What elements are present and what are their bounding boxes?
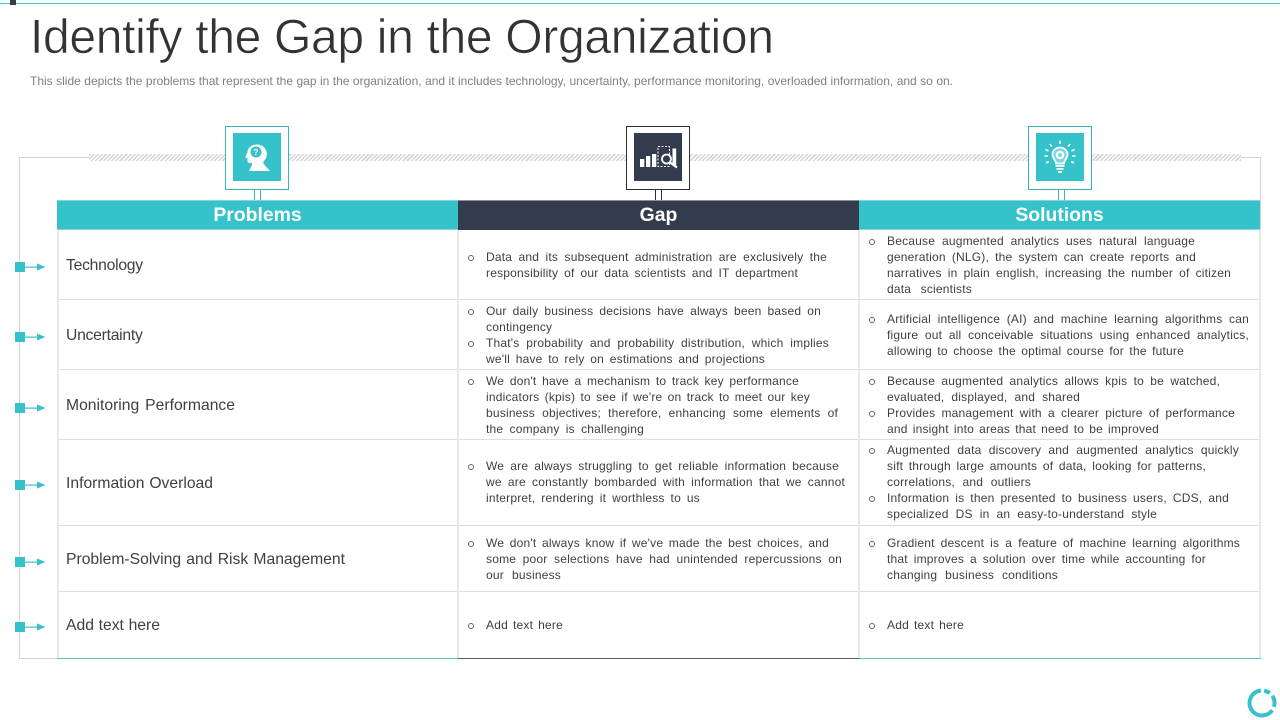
problem label: Information Overload: Information Overload bbox=[66, 475, 213, 492]
gap: uncertainty: That's probability and probability distribution, which implies bbox=[486, 336, 829, 350]
solution: information overload bbox=[869, 443, 1239, 521]
solution: monitoring performance: evaluated, displayed, and shared bbox=[887, 390, 1080, 404]
gap: technology: responsibility of our data scientists and IT department bbox=[486, 266, 798, 280]
icon: problems head: ? bbox=[253, 147, 259, 157]
gap: technology bbox=[468, 250, 827, 280]
gap: information overload: we are constantly bombarded with information that we cannot bbox=[486, 475, 845, 489]
icon: problems head bbox=[225, 126, 289, 190]
solution: information overload: Information is then presented to business users, CDS, and bbox=[887, 491, 1229, 505]
solution: uncertainty: allowing to choose the optimal course for the future bbox=[887, 344, 1184, 358]
gap: uncertainty: we'll have to rely on estimations and projections bbox=[486, 352, 765, 366]
header: Problems bbox=[57, 200, 458, 230]
row arrow 1 bbox=[15, 262, 46, 272]
logo ring bbox=[1248, 688, 1277, 718]
subtitle: This slide depicts the problems that represent the gap in the organization, and it includes technology, uncertainty, performance monitoring, overloaded information, and so on. bbox=[30, 74, 953, 88]
solution: monitoring performance bbox=[869, 374, 1235, 436]
solution: information overload: specialized DS in an easy-to-understand style bbox=[887, 507, 1157, 521]
header: Solutions: Solutions bbox=[1015, 204, 1104, 226]
solution: add text: Add text here bbox=[887, 618, 964, 632]
solution: problem-solving bbox=[869, 536, 1240, 582]
table bottom rule: gap bbox=[458, 658, 859, 659]
gap: problem-solving bbox=[468, 536, 842, 582]
row arrow 4 bbox=[15, 480, 46, 490]
connector: problems bbox=[254, 190, 261, 200]
gap: information overload: interpret, rendering it worthless to us bbox=[486, 491, 700, 505]
hatched band bbox=[89, 154, 1241, 161]
gap: problem-solving: We don't always know if we've made the best choices, and bbox=[486, 536, 829, 550]
gap: problem-solving: some poor selections have had unintended repercussions on bbox=[486, 552, 842, 566]
solution: monitoring performance: Provides management with a clearer picture of performance bbox=[887, 406, 1235, 420]
solution: problem-solving: that improves a solution over time while accounting for bbox=[887, 552, 1206, 566]
solution: problem-solving: Gradient descent is a feature of machine learning algorithms bbox=[887, 536, 1240, 550]
problem label: Monitoring Performance: Monitoring Performance bbox=[66, 397, 235, 414]
row arrow 6 bbox=[15, 622, 46, 632]
header: Gap bbox=[458, 200, 859, 230]
gap: monitoring performance: We don't have a mechanism to track key performance bbox=[486, 374, 799, 388]
table background bbox=[57, 230, 1260, 659]
problem label: Technology: Technology bbox=[66, 257, 143, 274]
solution: technology: data scientists bbox=[887, 282, 972, 296]
row arrow 3 bbox=[15, 403, 46, 413]
gap: monitoring performance bbox=[468, 374, 838, 436]
problem label: Uncertainty: Uncertainty bbox=[66, 327, 143, 344]
gap: technology: Data and its subsequent administration are exclusively the bbox=[486, 250, 827, 264]
table bottom rule: solutions bbox=[859, 658, 1261, 659]
table bottom rule: problems bbox=[57, 658, 458, 659]
solution: monitoring performance: and insight into areas that need to be improved bbox=[887, 422, 1159, 436]
solution: problem-solving: changing business conditions bbox=[887, 568, 1058, 582]
solution: uncertainty bbox=[869, 312, 1249, 358]
icon: solutions light bulb bbox=[1028, 126, 1092, 190]
solution: technology: generation (NLG), the system can create reports and bbox=[887, 250, 1196, 264]
solution: uncertainty: Artificial intelligence (AI) and machine learning algorithms can bbox=[887, 312, 1249, 326]
solution: information overload: Augmented data discovery and augmented analytics quickly bbox=[887, 443, 1239, 457]
solution: uncertainty: figure out all conceivable situations using enhanced analytics, bbox=[887, 328, 1249, 342]
row arrow 5 bbox=[15, 557, 46, 567]
title: Identify the Gap in the Organization bbox=[30, 11, 774, 64]
header: Problems: Problems bbox=[213, 204, 302, 226]
problem label: Problem-Solving and Risk Management: Problem-Solving and Risk Management bbox=[66, 551, 345, 568]
icon: gap analysis chart bbox=[626, 126, 690, 190]
gap: monitoring performance: business objectives; therefore, enhancing some elements of bbox=[486, 406, 838, 420]
top accent marker bbox=[10, 0, 16, 5]
solution: monitoring performance: Because augmented analytics allows kpis to be watched, bbox=[887, 374, 1220, 388]
top accent line bbox=[0, 3, 1280, 4]
row arrow 2 bbox=[15, 332, 46, 342]
solution: information overload: sift through large amounts of data, looking for patterns, bbox=[887, 459, 1206, 473]
header: Gap: Gap bbox=[640, 204, 677, 226]
solution: technology: narratives in plain english, increasing the number of citizen bbox=[887, 266, 1231, 280]
solution: information overload: correlations, and outliers bbox=[887, 475, 1031, 489]
gap: add text: Add text here bbox=[486, 618, 563, 632]
solution: technology: Because augmented analytics uses natural language bbox=[887, 234, 1195, 248]
gap: uncertainty bbox=[468, 304, 829, 366]
problem label: Add text here: Add text here bbox=[66, 617, 160, 634]
gap: information overload bbox=[468, 459, 845, 505]
header: Solutions bbox=[859, 200, 1260, 230]
gap: uncertainty: contingency bbox=[486, 320, 552, 334]
gap: monitoring performance: the company is challenging bbox=[486, 422, 644, 436]
connector: gap bbox=[655, 190, 662, 200]
gap: problem-solving: our business bbox=[486, 568, 561, 582]
solution: technology bbox=[869, 234, 1231, 296]
gap: uncertainty: Our daily business decisions have always been based on bbox=[486, 304, 821, 318]
gap: monitoring performance: indicators (kpis) to see if we're on track to meet our key bbox=[486, 390, 810, 404]
outer frame bbox=[19, 157, 1261, 659]
gap: information overload: We are always struggling to get reliable information because bbox=[486, 459, 839, 473]
connector: solutions bbox=[1058, 190, 1065, 200]
